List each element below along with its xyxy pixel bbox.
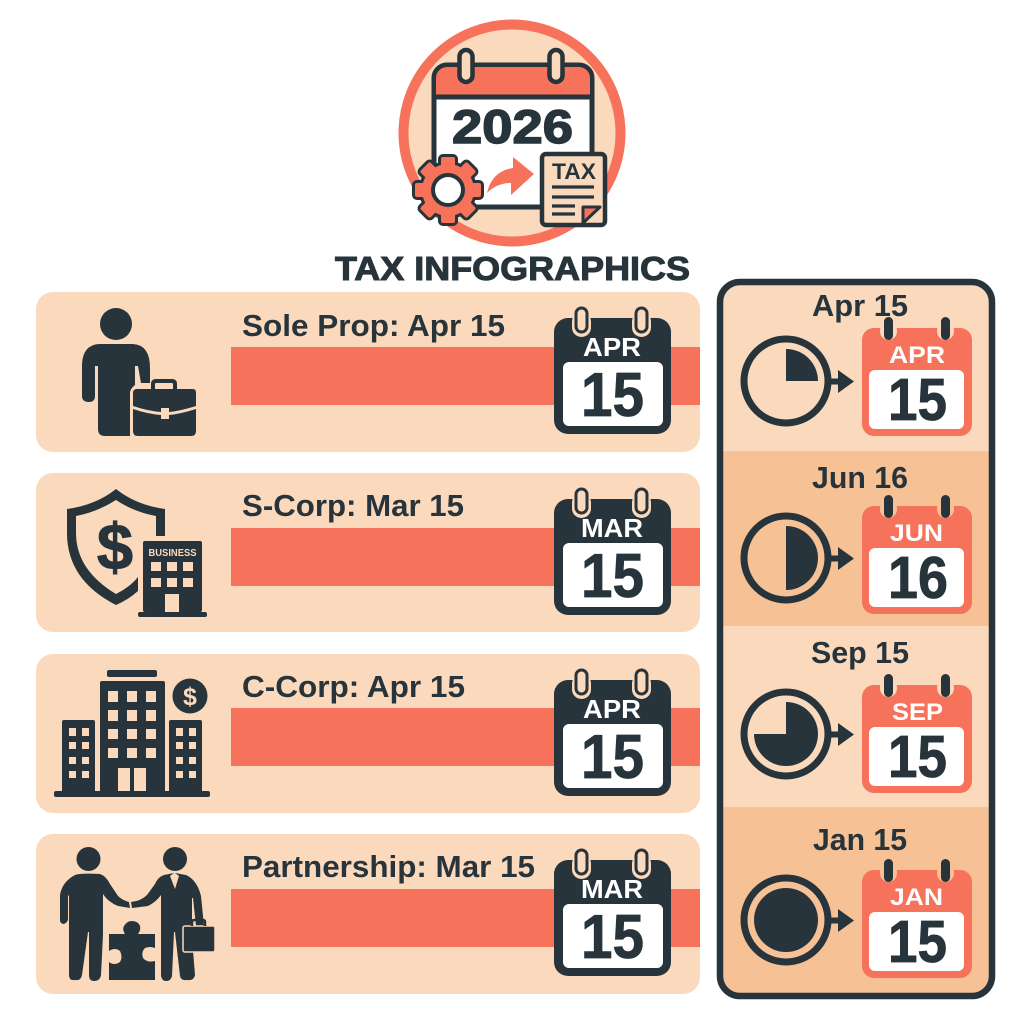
quarter row: Sep 15 (744, 635, 972, 793)
label: C-Corp: C-Corp: Apr 15 (242, 669, 465, 704)
label: Partnership: Partnership: Mar 15 (242, 849, 535, 884)
label: Sole Prop: Sole Prop: Apr 15 (242, 308, 505, 343)
quarter row: Sep 15: 15 (888, 724, 947, 790)
calendar: Mar 15: MAR (581, 874, 643, 904)
quarter row: Sep 15: SEP (892, 699, 943, 726)
header icon: calendar 2026 with gear, arrow and tax document: 2026 (452, 100, 573, 153)
quarter row: Jan 15: 15 (888, 909, 947, 975)
header icon: calendar 2026 with gear, arrow and tax document (404, 24, 620, 242)
icon: office buildings with coin (54, 670, 210, 797)
icon: office buildings with coin: $ (183, 683, 197, 711)
deadline bar: Sole Prop (231, 347, 700, 405)
panel: Partnership (36, 834, 700, 994)
panel: Sole Prop (36, 292, 700, 452)
quarter row: Jun 16: Jun 16 (812, 460, 908, 495)
quarter row: Jun 16: 16 (888, 545, 948, 611)
calendar: Mar 15 (554, 489, 671, 615)
label: S-Corp: S-Corp: Mar 15 (242, 488, 464, 523)
calendar: Apr 15: APR (583, 694, 641, 724)
calendar: Apr 15: 15 (581, 361, 644, 430)
icon: person with briefcase (82, 308, 196, 436)
calendar: Mar 15: MAR (581, 513, 643, 543)
quarter row: Jan 15: Jan 15 (813, 822, 907, 857)
quarter row: Jun 16 (744, 460, 972, 614)
icon: dollar shield with business building (67, 489, 207, 617)
quarter row: Jan 15: JAN (890, 884, 943, 911)
calendar: Mar 15: 15 (581, 542, 644, 611)
title: TAX INFOGRAPHICS (335, 250, 690, 287)
calendar: Mar 15: 15 (581, 903, 644, 972)
quarter row: Apr 15: Apr 15 (812, 288, 908, 323)
deadline bar: S-Corp (231, 528, 700, 586)
panel: estimated tax timeline (720, 282, 992, 996)
panel: C-Corp (36, 654, 700, 813)
quarter row: Apr 15 (744, 288, 972, 436)
header icon: calendar 2026 with gear, arrow and tax document: TAX (552, 159, 596, 184)
icon: dollar shield with business building: $ (97, 510, 133, 583)
deadline bar: C-Corp (231, 708, 700, 766)
calendar: Apr 15 (554, 670, 671, 796)
quarter row: Jan 15 (744, 822, 972, 978)
deadline bar: Partnership (231, 889, 700, 947)
icon: two partners shaking hands with puzzle piece (60, 847, 215, 981)
quarter row: Sep 15: Sep 15 (811, 635, 909, 670)
panel: S-Corp (36, 473, 700, 632)
icon: dollar shield with business building: BUSINESS (148, 548, 197, 559)
calendar: Apr 15: 15 (581, 723, 644, 792)
calendar: Mar 15 (554, 850, 671, 976)
quarter row: Apr 15: 15 (888, 367, 947, 433)
quarter row: Apr 15: APR (889, 342, 945, 369)
quarter row: Jun 16: JUN (890, 520, 943, 547)
calendar: Apr 15 (554, 308, 671, 434)
calendar: Apr 15: APR (583, 332, 641, 362)
